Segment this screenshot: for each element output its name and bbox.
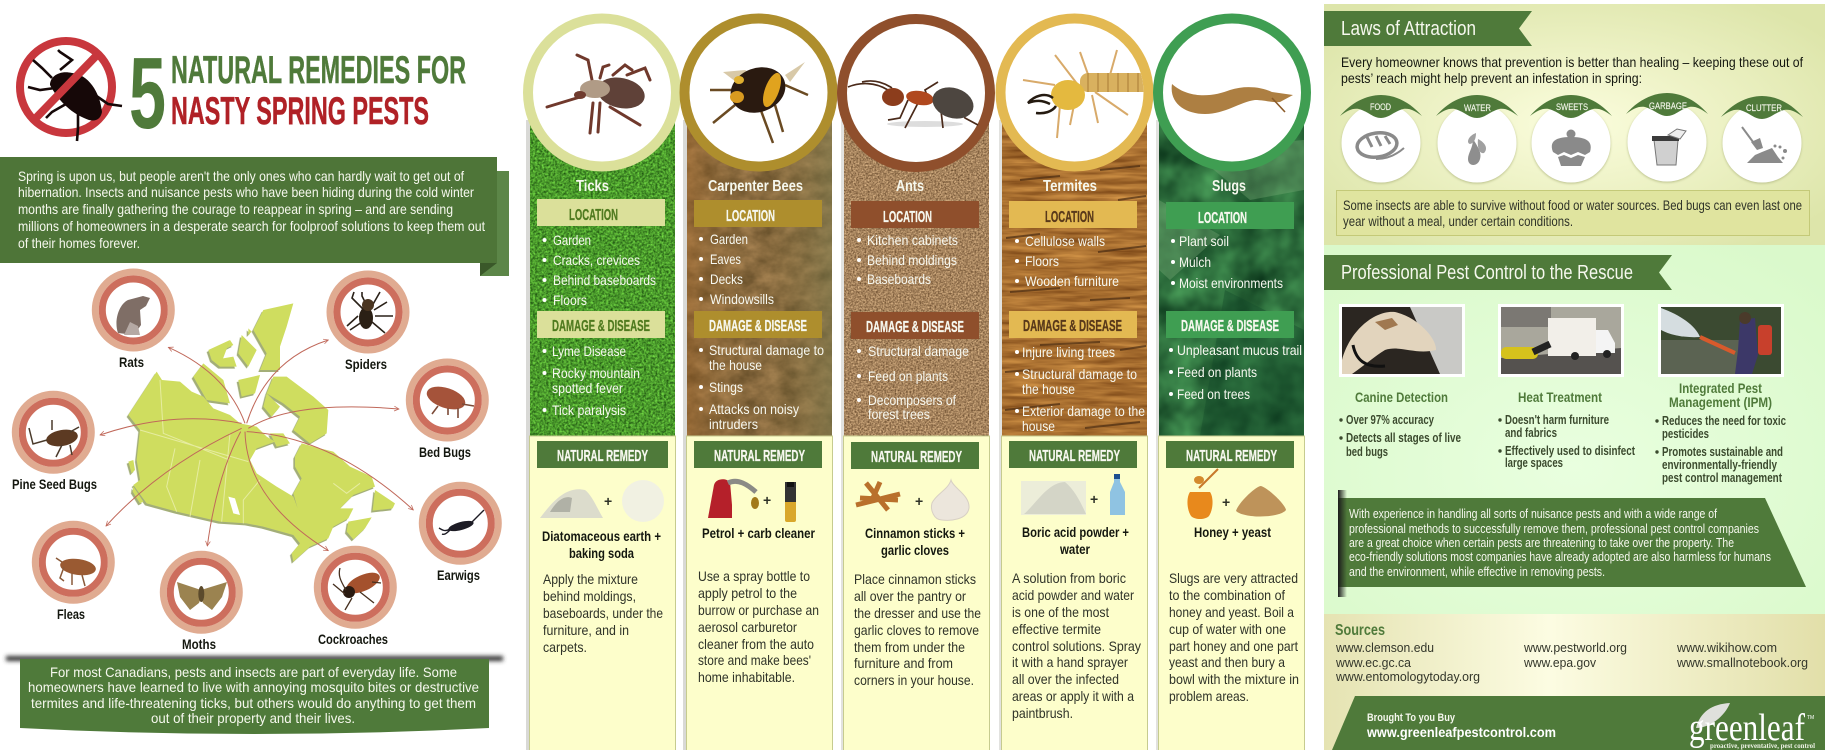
slugs details: Mulch: [1179, 254, 1211, 270]
callout: are a great choice when certain pests are threatening to take over the property. The: [1349, 536, 1734, 550]
note box: year without a meal, under certain conditions.: [1343, 213, 1573, 229]
termites remedy card: it with a hand sprayer: [1012, 654, 1128, 670]
pest: pine seed bugs: [12, 394, 97, 492]
panel: carpenter bees column: [683, 18, 832, 750]
ticks details: LOCATION: [569, 207, 618, 224]
icon: food: [1340, 95, 1422, 182]
panel: intro and Canada map: [0, 38, 509, 734]
ticks remedy card: furniture, and in: [543, 622, 629, 638]
slugs details: LOCATION: [1198, 210, 1247, 227]
pest: cockroaches: [317, 549, 393, 647]
method: canine detection: Detects all stages of live: [1346, 431, 1461, 445]
bees remedy card: Petrol + carb cleaner: [702, 525, 815, 541]
termites details: LOCATION: [1045, 209, 1094, 226]
ants remedy card: corners in your house.: [854, 672, 974, 688]
bees details: Garden: [710, 231, 748, 247]
bees details: Structural damage to: [709, 342, 824, 358]
pest: cockroaches: Cockroaches: [318, 631, 388, 647]
panel: professional pest control: [1324, 245, 1825, 614]
slugs remedy card: cup of water with one: [1169, 621, 1286, 637]
pest: fleas: [35, 524, 111, 622]
banner heading: Professional Pest Control to the Rescue: [1341, 262, 1633, 284]
bottom callout banner: termites and life-threatening ticks, but others would do anything to get them: [31, 695, 476, 711]
ticks remedy card: [530, 436, 676, 750]
slugs remedy card: part honey and one part: [1169, 638, 1298, 654]
method: integrated pest management: [1655, 380, 1786, 485]
termites details: house: [1022, 418, 1055, 434]
panel: ticks column: [526, 18, 676, 750]
icon: sweets: [1530, 95, 1612, 182]
ticks details: Floors: [553, 292, 587, 308]
method: heat treatment: Doesn't harm furniture: [1505, 413, 1609, 427]
photo: canine detection: [1339, 304, 1465, 377]
termites remedy card: areas or apply it with a: [1012, 688, 1134, 704]
panel: slugs column: [1156, 18, 1306, 750]
pest: rats: [95, 272, 171, 370]
method: heat treatment: [1498, 389, 1636, 470]
ticks details: Tick paralysis: [552, 402, 626, 418]
slugs details: [1166, 178, 1302, 402]
bottom callout banner: homeowners have learned to live with annoying mosquito bites or destructive: [28, 679, 479, 695]
panel: laws of attraction: [1324, 4, 1825, 245]
bees details: the house: [709, 357, 762, 373]
ants portrait: [842, 19, 990, 167]
ants details: Baseboards: [867, 271, 931, 287]
panel: sources and footer: [1324, 614, 1825, 750]
bees details: Stings: [709, 379, 743, 395]
icon: garbage: GARBAGE: [1649, 101, 1687, 112]
bees details: intruders: [709, 416, 758, 432]
title: 5: [129, 38, 166, 150]
slugs remedy card: Honey + yeast: [1194, 524, 1271, 540]
icon: clutter: [1721, 96, 1803, 182]
sources list: www.smallnotebook.org: [1676, 655, 1808, 670]
banner heading: [1324, 255, 1672, 290]
icon: water: WATER: [1464, 103, 1491, 114]
termites remedy card: [1002, 436, 1148, 750]
bees details: Decks: [710, 271, 743, 287]
icon: garbage: [1626, 93, 1708, 182]
title: NASTY SPRING PESTS: [171, 90, 429, 133]
pest: earwigs: [422, 485, 498, 583]
icon: sweets: SWEETS: [1556, 102, 1588, 113]
termites remedy card: NATURAL REMEDY: [1029, 448, 1120, 465]
method: integrated pest management: environmentally-friendly: [1662, 458, 1777, 472]
ticks remedy card: NATURAL REMEDY: [557, 448, 648, 465]
termites details: Structural damage to: [1022, 366, 1137, 382]
slugs details: Feed on plants: [1177, 364, 1257, 380]
ants remedy card: all over the pantry or: [854, 588, 966, 604]
slugs details: DAMAGE & DISEASE: [1181, 318, 1279, 335]
bees remedy card: [686, 436, 832, 750]
map of Canada with arrows: [100, 303, 413, 562]
banner heading: Laws of Attraction: [1341, 18, 1476, 40]
pest: fleas: Fleas: [57, 606, 85, 622]
intro banner: millions of homeowners in a desperate search for foolproof solutions to keep them out: [18, 218, 485, 234]
method: integrated pest management: Integrated Pest: [1679, 380, 1762, 396]
footer band: www.greenleafpestcontrol.com: [1366, 725, 1556, 740]
ants details: Kitchen cabinets: [867, 232, 958, 248]
termites details: [1009, 178, 1145, 434]
bees details: [694, 178, 824, 432]
intro banner: hibernation. Insects and nuisance pests who have been hiding during the cold winter: [18, 184, 474, 200]
panel: termites column: [999, 18, 1155, 750]
pest: rats: Rats: [119, 354, 144, 370]
bees remedy card: Use a spray bottle to: [698, 568, 810, 584]
sources list: [1335, 622, 1808, 684]
ticks remedy card: Diatomaceous earth +: [542, 528, 661, 544]
ants remedy card: garlic cloves: [881, 542, 949, 558]
termites remedy card: all over the infected: [1012, 671, 1119, 687]
slugs remedy card: honey and yeast. Boil a: [1169, 604, 1294, 620]
ants remedy card: the dresser and use the: [854, 605, 981, 621]
callout: professional methods to successfully remove them, professional pest control companies: [1349, 522, 1759, 536]
photo: integrated pest management: [1658, 304, 1784, 377]
termites details: DAMAGE & DISEASE: [1023, 318, 1122, 335]
bees remedy card: aerosol carburetor: [698, 619, 797, 635]
bottom callout banner: [6, 656, 503, 734]
photo: heat treatment: [1498, 304, 1624, 377]
intro banner: [0, 157, 509, 276]
ticks details: Cracks, crevices: [553, 252, 640, 268]
bees details: DAMAGE & DISEASE: [709, 318, 807, 335]
method: integrated pest management: pest control management: [1662, 471, 1783, 485]
bees remedy card: cleaner from the auto: [698, 636, 814, 652]
slugs remedy card: NATURAL REMEDY: [1186, 448, 1277, 465]
pest: spiders: [330, 274, 406, 372]
bees remedy card: burrow or purchase an: [698, 602, 819, 618]
slugs details: Moist environments: [1179, 275, 1283, 291]
ticks remedy card: baseboards, under the: [543, 605, 663, 621]
method: heat treatment: and fabrics: [1505, 426, 1557, 440]
intro paragraph: [1341, 54, 1803, 86]
sources list: www.pestworld.org: [1523, 640, 1627, 655]
termites details: Injure living trees: [1022, 344, 1115, 360]
slugs remedy card: to the combination of: [1169, 587, 1285, 603]
ants details: Structural damage: [868, 343, 969, 359]
bees remedy card: apply petrol to the: [698, 585, 797, 601]
method: canine detection: Canine Detection: [1355, 389, 1448, 405]
slugs remedy card: Slugs are very attracted: [1169, 570, 1298, 586]
bottom callout banner: out of their property and their lives.: [151, 710, 355, 726]
termites remedy card: acid powder and water: [1012, 587, 1134, 603]
intro banner: of their homes forever.: [18, 235, 140, 251]
termites remedy card: is one of the most: [1012, 604, 1109, 620]
sources list: www.ec.gc.ca: [1335, 655, 1412, 670]
method: canine detection: [1339, 389, 1461, 459]
pest: pine seed bugs: Pine Seed Bugs: [12, 476, 97, 492]
footer band: Brought To you Buy: [1367, 712, 1456, 724]
termites remedy card: control solutions. Spray: [1012, 638, 1141, 654]
method: canine detection: Over 97% accuracy: [1346, 413, 1434, 427]
termites details: the house: [1022, 381, 1075, 397]
method: integrated pest management: Management (IPM): [1669, 394, 1772, 410]
ants remedy card: Cinnamon sticks +: [865, 525, 965, 541]
termites remedy card: A solution from boric: [1012, 570, 1126, 586]
ticks details: Ticks: [576, 178, 609, 195]
ticks details: Garden: [553, 232, 591, 248]
logo: greenleaf: proactive, preventative, pest control: [1710, 741, 1815, 750]
method: integrated pest management: Reduces the need for toxic: [1662, 414, 1786, 428]
bees details: Attacks on noisy: [709, 401, 799, 417]
termites details: Floors: [1025, 253, 1059, 269]
termites remedy card: Boric acid powder +: [1022, 524, 1129, 540]
bees remedy card: NATURAL REMEDY: [714, 448, 805, 465]
pest: moths: [163, 554, 239, 652]
bees remedy card: home inhabitable.: [698, 669, 795, 685]
ticks details: Rocky mountain: [552, 365, 640, 381]
icon: food: FOOD: [1370, 102, 1391, 113]
slugs remedy card: yeast and then bury a: [1169, 654, 1285, 670]
termites portrait: [1000, 18, 1155, 166]
method: canine detection: bed bugs: [1346, 445, 1388, 459]
termites details: Exterior damage to the: [1022, 403, 1145, 419]
method: integrated pest management: Promotes sustainable and: [1662, 445, 1783, 459]
method: heat treatment: Effectively used to disinfect: [1505, 444, 1636, 458]
icon: clutter: CLUTTER: [1746, 103, 1782, 114]
ants remedy card: +: [915, 493, 923, 509]
bees details: LOCATION: [726, 208, 775, 225]
ants remedy card: them from under the: [854, 639, 965, 655]
callout: With experience in handling all sorts of nuisance pests and with a wide range of: [1349, 507, 1717, 521]
ticks remedy card: +: [604, 493, 612, 509]
pest: moths: Moths: [182, 636, 216, 652]
logo: greenleaf: TM: [1807, 715, 1814, 721]
bees details: Windowsills: [710, 291, 774, 307]
callout: [1338, 490, 1806, 597]
ticks details: spotted fever: [552, 380, 623, 396]
termites remedy card: +: [1090, 491, 1098, 507]
panel: ants column: [841, 19, 990, 750]
sources list: www.wikihow.com: [1676, 640, 1777, 655]
ants remedy card: furniture and from: [854, 655, 953, 671]
pest: bed bugs: [409, 362, 485, 460]
termites details: Termites: [1043, 178, 1097, 195]
ants details: DAMAGE & DISEASE: [866, 319, 964, 336]
sources list: www.clemson.edu: [1335, 640, 1434, 655]
ants remedy card: [844, 436, 990, 750]
slugs portrait: [1158, 18, 1306, 166]
sources list: www.entomologytoday.org: [1335, 669, 1480, 684]
slugs remedy card: [1158, 436, 1304, 750]
slugs details: Unpleasant mucus trail: [1177, 342, 1302, 358]
pest: bed bugs: Bed Bugs: [419, 444, 471, 460]
slugs details: Slugs: [1212, 178, 1246, 195]
bees remedy card: store and make bees': [698, 652, 811, 668]
banner heading: [1324, 11, 1532, 46]
ticks remedy card: baking soda: [569, 545, 634, 561]
method: integrated pest management: pesticides: [1662, 427, 1709, 441]
termites remedy card: paintbrush.: [1012, 705, 1073, 721]
ants details: Behind moldings: [867, 252, 957, 268]
sources list: Sources: [1335, 622, 1385, 639]
note box: [1336, 190, 1810, 236]
bees portrait: [684, 18, 832, 166]
slugs details: Feed on trees: [1177, 386, 1250, 402]
termites remedy card: effective termite: [1012, 621, 1101, 637]
ants remedy card: NATURAL REMEDY: [871, 449, 962, 466]
slugs remedy card: bowl with the mixture in: [1169, 671, 1299, 687]
ants details: LOCATION: [883, 209, 932, 226]
termites details: Cellulose walls: [1025, 233, 1105, 249]
ticks remedy card: Apply the mixture: [543, 571, 638, 587]
bees details: Carpenter Bees: [708, 178, 803, 195]
termites remedy card: water: [1059, 541, 1090, 557]
ants details: Feed on plants: [868, 368, 948, 384]
intro banner: Spring is upon us, but people aren't the only ones who can hardly wait to get out of: [18, 168, 464, 184]
sources list: www.epa.gov: [1523, 655, 1596, 670]
ants details: Ants: [896, 178, 924, 195]
intro paragraph: pests’ reach might help prevent an infestation in spring:: [1341, 70, 1642, 86]
termites details: Wooden furniture: [1025, 273, 1119, 289]
ticks portrait: [528, 18, 676, 166]
ticks details: DAMAGE & DISEASE: [552, 318, 650, 335]
icon: water: [1436, 95, 1518, 182]
title: NATURAL REMEDIES FOR: [171, 49, 466, 92]
ticks remedy card: behind moldings,: [543, 588, 636, 604]
ticks details: Behind baseboards: [553, 272, 656, 288]
ticks remedy card: carpets.: [543, 639, 587, 655]
method: heat treatment: large spaces: [1505, 456, 1563, 470]
method: heat treatment: Heat Treatment: [1518, 389, 1602, 405]
ants details: Decomposers of: [868, 392, 956, 408]
bees details: Eaves: [710, 251, 741, 267]
title: [129, 38, 466, 150]
slugs remedy card: +: [1222, 494, 1230, 510]
ants remedy card: Place cinnamon sticks: [854, 571, 976, 587]
ants details: forest trees: [868, 406, 930, 422]
slugs details: Plant soil: [1179, 233, 1229, 249]
intro banner: months are finally gathering the courage to reappear in spring – and are sending: [18, 201, 453, 217]
callout: and the environment, while effective in removing pests.: [1349, 565, 1605, 579]
footer band: [1332, 696, 1825, 750]
ants remedy card: garlic cloves to remove: [854, 622, 979, 638]
icon: no bugs sign: [20, 41, 122, 141]
pest: earwigs: Earwigs: [437, 567, 480, 583]
ticks details: [537, 178, 665, 418]
bottom callout banner: For most Canadians, pests and insects are part of everyday life. Some: [50, 664, 457, 680]
bees remedy card: +: [763, 492, 771, 508]
pest: spiders: Spiders: [345, 356, 387, 372]
slugs remedy card: problem areas.: [1169, 688, 1249, 704]
ticks details: Lyme Disease: [552, 343, 626, 359]
ants details: [851, 178, 979, 422]
